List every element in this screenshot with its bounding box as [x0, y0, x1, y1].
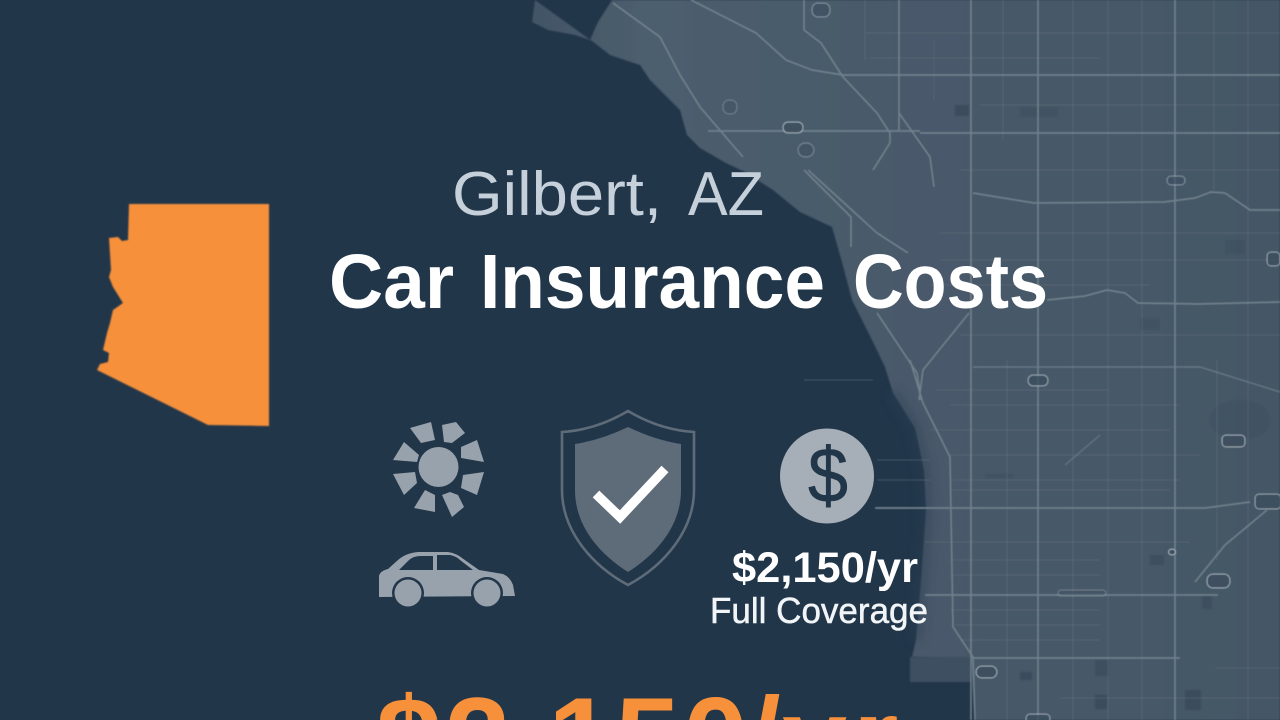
land mass: [532, 0, 1280, 720]
heading: location: Gilbert,: [452, 160, 662, 229]
icon: dollar coin: $: [808, 431, 848, 519]
heading: location: [452, 160, 764, 229]
dark city blocks: [955, 105, 1270, 710]
heading: location: AZ: [688, 160, 764, 229]
stat: annual cost: $2,150/yr: [732, 544, 918, 592]
stat label: full coverage: Full Coverage: [710, 590, 928, 631]
major roads: [613, 0, 1280, 720]
icon: shield with check: [562, 411, 694, 585]
heading: main title: Insurance: [480, 239, 825, 325]
icon: Arizona state shape: [97, 204, 269, 426]
check mark: [596, 469, 665, 517]
minor street grid: [865, 0, 1280, 720]
icon: car: [379, 552, 515, 609]
map of the Gilbert area: [532, 0, 1280, 720]
heading: main title: Car: [329, 239, 454, 325]
route shield markers: [723, 3, 1280, 720]
coastal shading: [893, 393, 926, 640]
harbour shelf: [910, 657, 971, 682]
faint lines over the water: [804, 380, 930, 508]
icon: sun: [393, 422, 484, 517]
heading: main title: Costs: [853, 239, 1048, 325]
icon: dollar coin: [780, 428, 874, 524]
heading: main title: [329, 239, 1048, 325]
